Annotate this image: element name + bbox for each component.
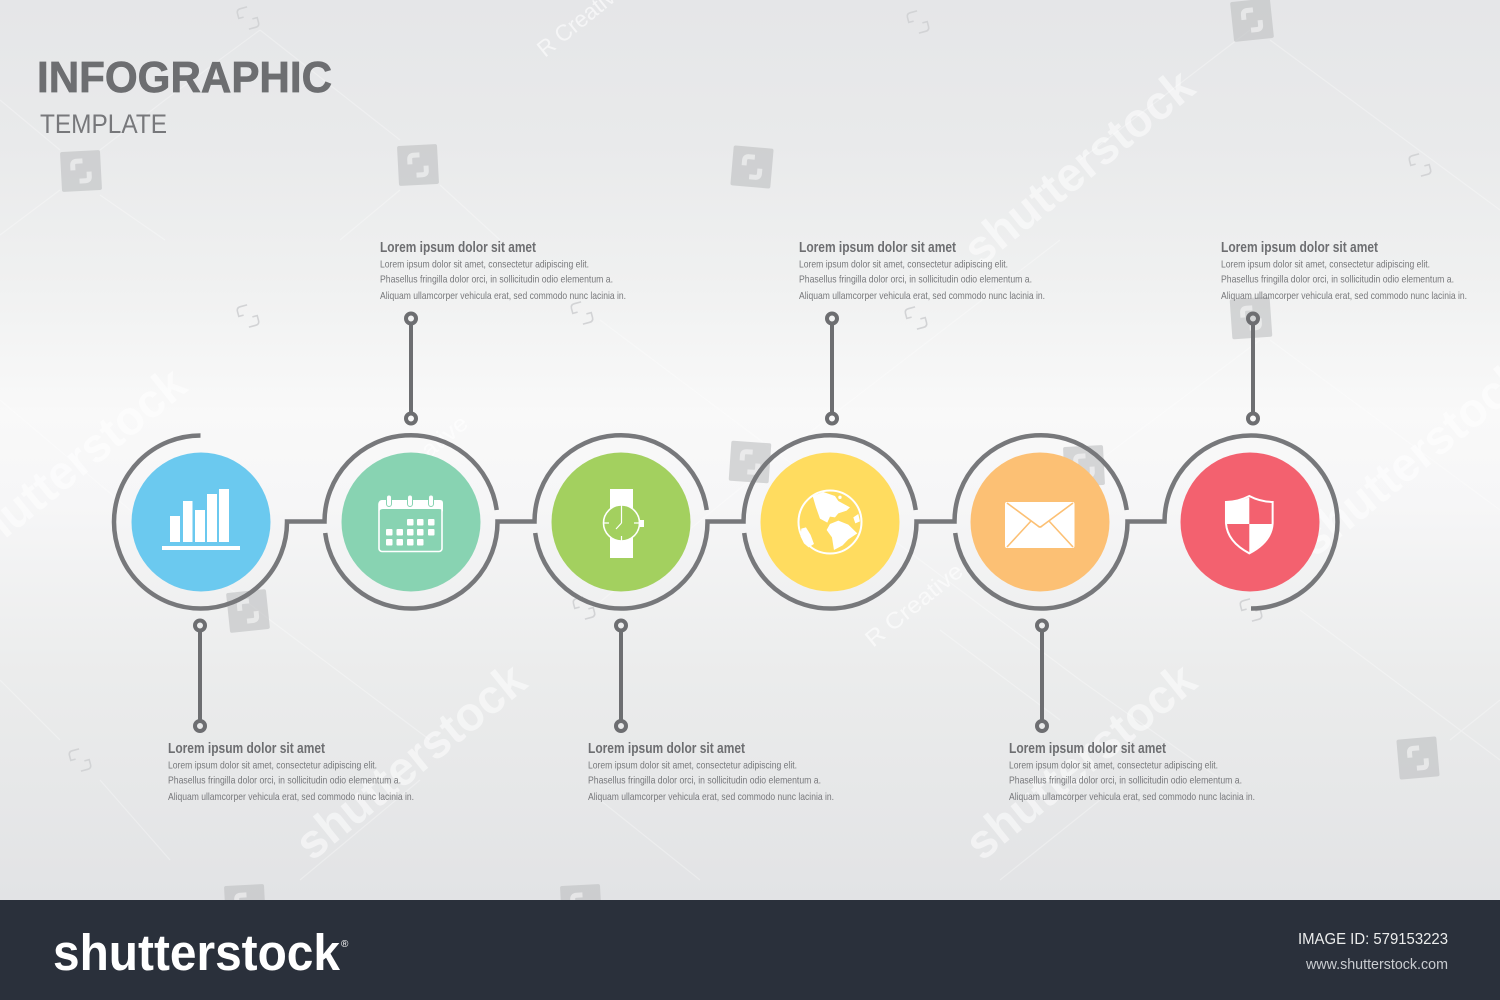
icon: calendar [379, 495, 443, 552]
text block 5: Lorem ipsum dolor sit amet, consectetur adipiscing elit. [1009, 760, 1218, 772]
text block 1: Phasellus fringilla dolor orci, in sollicitudin odio elementum a. [168, 774, 401, 786]
text block 2: Lorem ipsum dolor sit amet, consectetur adipiscing elit. [380, 258, 589, 270]
text block 5: Lorem ipsum dolor sit amet [1009, 740, 1166, 757]
text block 2: Lorem ipsum dolor sit amet [380, 239, 536, 256]
text block 4: Aliquam ullamcorper vehicula erat, sed commodo nunc lacinia in. [799, 290, 1045, 302]
text block 3: Lorem ipsum dolor sit amet, consectetur adipiscing elit. [588, 760, 797, 772]
text block 1: Lorem ipsum dolor sit amet [168, 740, 325, 757]
text block 6: Phasellus fringilla dolor orci, in sollicitudin odio elementum a. [1221, 274, 1454, 286]
text block 1: Aliquam ullamcorper vehicula erat, sed commodo nunc lacinia in. [168, 791, 414, 803]
footer logo: shutterstock [53, 924, 341, 981]
text block 5: Phasellus fringilla dolor orci, in sollicitudin odio elementum a. [1009, 774, 1242, 786]
ring connector line [114, 435, 1337, 609]
icon: shield [1226, 496, 1273, 553]
text block 5: Aliquam ullamcorper vehicula erat, sed commodo nunc lacinia in. [1009, 791, 1255, 803]
step 4: globe [760, 452, 900, 592]
leader line 5 [1037, 620, 1047, 731]
text block 4: Lorem ipsum dolor sit amet [799, 239, 956, 256]
subtitle: TEMPLATE [40, 109, 167, 139]
text block 6: Lorem ipsum dolor sit amet [1221, 239, 1378, 256]
leader line 2 [406, 314, 416, 424]
step 3: watch [552, 452, 690, 592]
text block 3: Phasellus fringilla dolor orci, in sollicitudin odio elementum a. [588, 774, 821, 786]
text block 1: Lorem ipsum dolor sit amet, consectetur adipiscing elit. [168, 760, 377, 772]
icon: envelope [1005, 502, 1074, 548]
watermark overlay: R Creative [365, 409, 473, 504]
text block 1 [168, 740, 414, 803]
image id: IMAGE ID: 579153223 [1298, 931, 1448, 948]
title: INFOGRAPHIC [37, 53, 332, 102]
leader line 4 [827, 314, 837, 424]
leader line 6 [1248, 314, 1258, 424]
text block 2: Phasellus fringilla dolor orci, in sollicitudin odio elementum a. [380, 274, 613, 286]
icon: watch [604, 489, 644, 558]
step 2: calendar [342, 452, 480, 592]
watermark overlay: shutterstock [286, 653, 537, 871]
text block 3 [588, 740, 834, 803]
text block 6: Lorem ipsum dolor sit amet, consectetur adipiscing elit. [1221, 258, 1430, 270]
icon: globe [798, 490, 862, 554]
website: www.shutterstock.com [1305, 957, 1448, 973]
icon: bar chart [162, 489, 240, 550]
leader line 1 [195, 620, 205, 731]
step 6: shield [1180, 452, 1320, 592]
text block 6 [1221, 239, 1467, 302]
watermark overlay: shutterstock [956, 653, 1207, 871]
watermark overlay: shutterstock [954, 59, 1205, 277]
text block 4 [799, 239, 1045, 302]
text block 4: Lorem ipsum dolor sit amet, consectetur adipiscing elit. [799, 258, 1008, 270]
text block 5 [1009, 740, 1255, 803]
text block 2 [380, 239, 626, 302]
text block 3: Aliquam ullamcorper vehicula erat, sed commodo nunc lacinia in. [588, 791, 834, 803]
text block 4: Phasellus fringilla dolor orci, in sollicitudin odio elementum a. [799, 274, 1032, 286]
text block 2: Aliquam ullamcorper vehicula erat, sed commodo nunc lacinia in. [380, 290, 626, 302]
watermark overlay: R Creative [860, 557, 968, 652]
step 5: envelope [970, 452, 1110, 592]
text block 3: Lorem ipsum dolor sit amet [588, 740, 745, 757]
leader line 3 [616, 620, 626, 731]
title [37, 53, 332, 139]
step 1: bar chart [132, 452, 270, 592]
registered mark: ® [341, 939, 349, 950]
footer bar [0, 900, 1500, 1000]
